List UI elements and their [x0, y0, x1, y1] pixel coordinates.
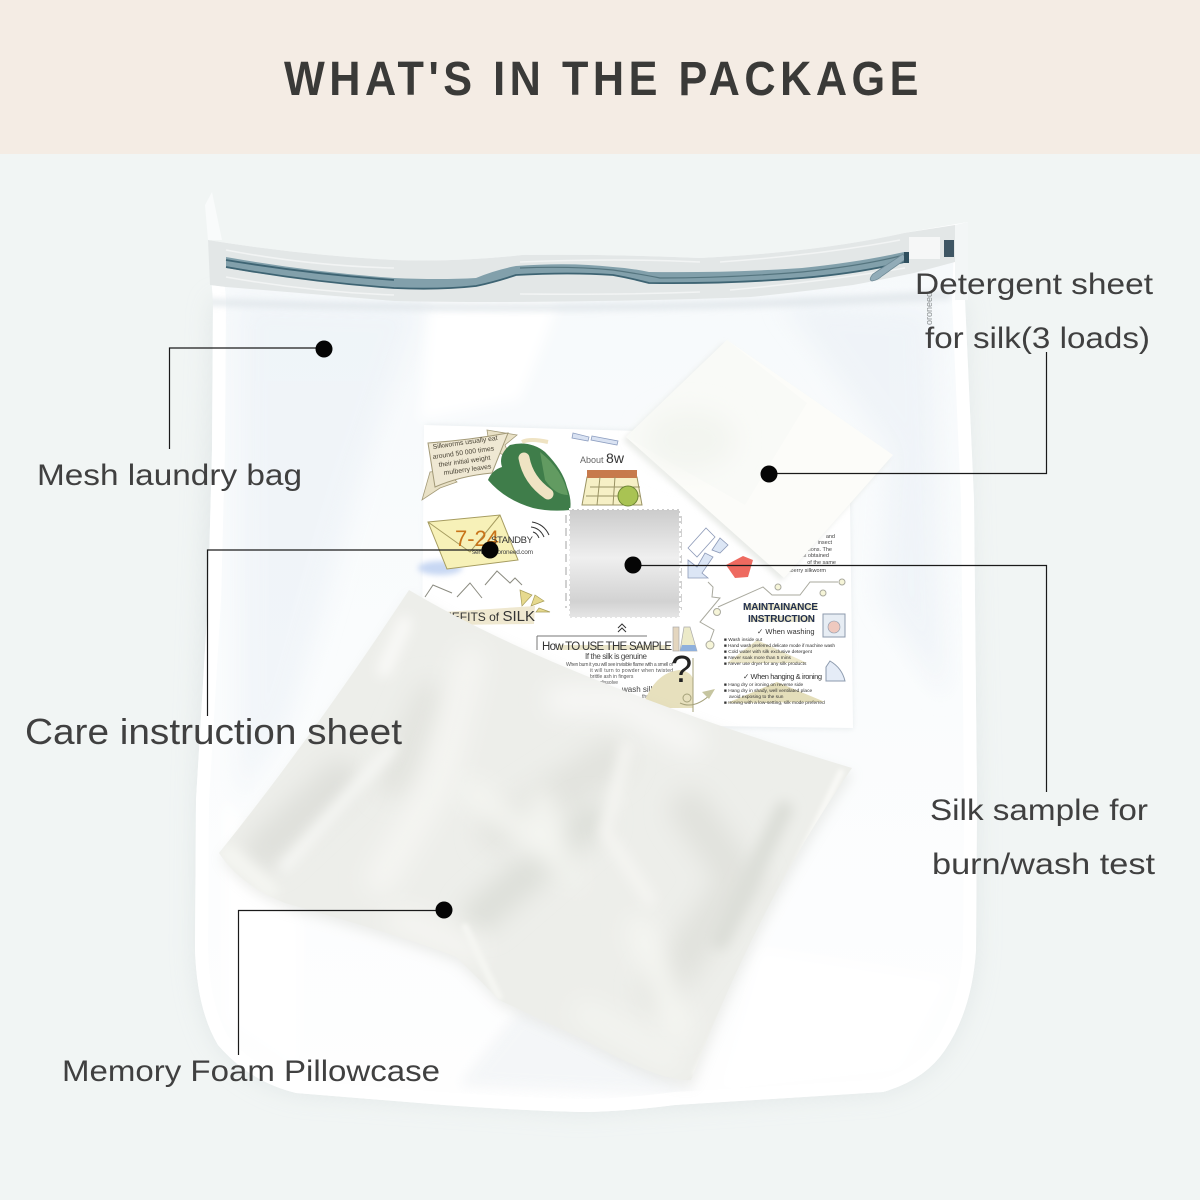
callout: detergent sheet	[760, 268, 1154, 482]
maintainance instruction block: ■ Wash inside out	[724, 637, 763, 643]
maintainance instruction block: ■ Ironing with a low-setting, silk mode preferred	[724, 700, 825, 706]
text under detergent sheet: insect	[818, 540, 832, 546]
illustration: how to use the sample: it will turn to powder when twisted	[590, 668, 673, 674]
callout: memory foam pillowcase: Memory Foam Pillowcase	[62, 1055, 440, 1088]
pillowcase	[219, 590, 854, 1086]
callout: detergent sheet: for silk(3 loads)	[925, 322, 1150, 355]
title: WHAT'S IN THE PACKAGE	[284, 52, 919, 106]
callout: care instruction sheet	[25, 542, 498, 752]
text under detergent sheet	[782, 534, 836, 574]
illustration: envelope: 7-24	[455, 526, 499, 551]
maintainance instruction block: ■ Hang dry or ironing on reverse side	[724, 682, 803, 688]
callout: mesh laundry bag	[37, 340, 332, 492]
illustration: how to use the sample: brittle ash in fingers	[590, 674, 634, 680]
callout: care instruction sheet: Care instruction sheet	[25, 711, 402, 752]
maintainance instruction block: ■ Never use dryer for any silk products	[724, 661, 807, 667]
satin sheen	[250, 623, 842, 974]
illustration: envelope: STANDBY	[491, 535, 534, 546]
text under detergent sheet: mulberry silkworm	[782, 568, 826, 574]
illustration: ribbon note	[422, 430, 517, 500]
illustration: calendar	[582, 470, 642, 506]
illustration: ribbon note: their initial weight	[438, 455, 491, 469]
illustration: envelope: service@oroneed.com	[472, 549, 533, 556]
brand mark: oroneed	[924, 292, 934, 325]
care instruction sheet	[418, 425, 853, 729]
callout: detergent sheet: Detergent sheet	[915, 268, 1154, 301]
text under detergent sheet: of the same	[807, 560, 836, 566]
illustration: triangles	[520, 590, 550, 612]
illustration: leaf and silkworm	[488, 440, 571, 511]
maintainance instruction block: ■ Cold water with silk exclusive detergent	[724, 649, 813, 655]
illustration: tabs	[572, 433, 618, 445]
maintainance instruction block: avoid exposing to the sun	[729, 694, 784, 700]
illustration: circuit lines	[700, 579, 845, 649]
illustration: gem	[726, 556, 753, 578]
callout: silk sample: burn/wash test	[932, 848, 1156, 881]
illustration: how to use the sample: dissolve	[600, 680, 618, 686]
folds and seam	[195, 222, 977, 1112]
maintainance instruction block: MAINTAINANCE	[743, 602, 818, 613]
zipper band	[208, 222, 968, 302]
zipper pull	[870, 254, 906, 281]
illustration: how to use the sample: How TO USE THE SAMPLE	[542, 641, 672, 653]
illustration: how to use the sample: wash silk	[621, 685, 655, 694]
maintainance instruction block: ■ Hang dry in shady, well ventilated place	[724, 688, 812, 694]
callout: memory foam pillowcase	[62, 902, 452, 1088]
silk sample	[566, 509, 681, 618]
illustration: benefits of silk heading: BENEFITS of SILK	[427, 608, 535, 625]
illustration: ribbon note: Silkworms usually eat	[432, 435, 498, 451]
maintainance instruction block: ✓ When hanging & ironing	[743, 672, 822, 681]
detergent sheet	[623, 340, 893, 581]
illustration: envelope	[418, 515, 549, 575]
callout: mesh laundry bag: Mesh laundry bag	[37, 459, 302, 492]
text under detergent sheet: tions. The	[808, 547, 832, 553]
illustration: chevrons	[618, 624, 626, 632]
title band	[0, 0, 1200, 154]
illustration: how to use the sample: ?	[671, 649, 692, 691]
maintainance instruction block	[724, 602, 845, 706]
left corner tab	[205, 192, 222, 240]
illustration: how to use the sample: When burn it you will see invisible flame with a smell of	[566, 662, 674, 668]
mesh laundry bag	[195, 192, 977, 1112]
illustration: ribbon note: mulberry leaves	[443, 463, 492, 477]
illustration: mountains	[425, 571, 522, 598]
callout: silk sample: Silk sample for	[930, 794, 1148, 827]
text under detergent sheet: and	[826, 534, 835, 540]
callout: silk sample	[624, 556, 1156, 881]
maintainance instruction block: ■ Never soak more than 5 mins	[724, 655, 791, 661]
illustration: ribbon note: around 50 000 times	[432, 445, 495, 461]
illustration: how to use the sample: the instruction	[642, 694, 673, 700]
maintainance instruction block: ✓ When washing	[757, 627, 815, 636]
zipper end label	[909, 237, 940, 259]
illustration: how to use the sample: If the silk is genuine	[585, 652, 648, 661]
illustration: about 8 weeks text: About 8w	[580, 450, 625, 466]
text under detergent sheet: is obtained	[802, 553, 829, 559]
maintainance instruction block: INSTRUCTION	[748, 614, 815, 625]
maintainance instruction block: ■ Hand wash preferred delicate mode if machine wash	[724, 643, 835, 649]
illustration: how to use the sample	[537, 627, 715, 712]
illustration: arrow shape	[688, 528, 728, 578]
